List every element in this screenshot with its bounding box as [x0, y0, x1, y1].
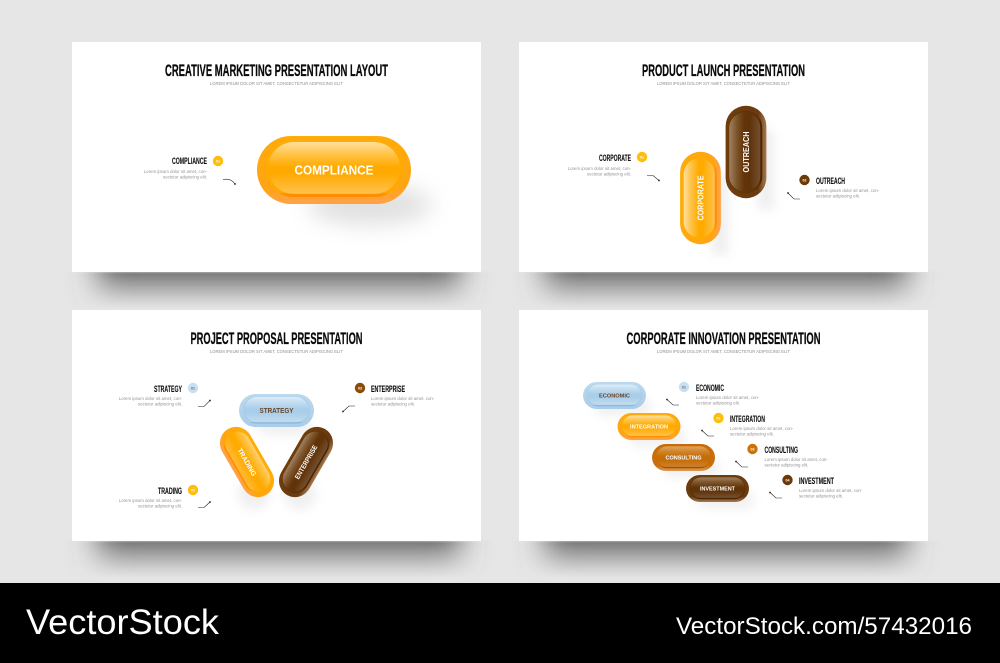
label: enterprise [355, 383, 435, 406]
pill: integration: INTEGRATION [630, 424, 668, 430]
footer logo: VectorStock [26, 603, 220, 642]
pill shadows [238, 420, 316, 510]
arrow [198, 501, 211, 508]
pill: economic [583, 382, 646, 409]
pill shadows [595, 398, 754, 509]
pill shadows [712, 130, 774, 255]
arrow [735, 461, 748, 467]
pill: compliance [257, 136, 411, 204]
arrow [198, 400, 211, 406]
pill: consulting: CONSULTING [666, 456, 702, 462]
label: strategy: 01 [191, 386, 195, 390]
label: enterprise: ENTERPRISE [371, 384, 405, 394]
title: PRODUCT LAUNCH PRESENTATION [642, 61, 805, 80]
label: integration: sectetur adipiscing elit. [730, 432, 774, 436]
pill: enterprise [273, 421, 339, 503]
pill: corporate [680, 152, 721, 244]
panel shadows [98, 272, 907, 579]
label: integration: INTEGRATION [730, 414, 765, 424]
label: corporate: CORPORATE [599, 153, 631, 163]
pill: outreach: OUTREACH [742, 131, 751, 172]
label: compliance: Lorem ipsum dolor sit amet, con- [144, 169, 208, 174]
label: economic [679, 382, 760, 406]
label: economic: ECONOMIC [696, 383, 724, 393]
subtitle: LOREM IPSUM DOLOR SIT AMET, CONSECTETUR ADIPISCING ELIT [657, 81, 790, 86]
panel: product launch [519, 42, 928, 272]
subtitle: LOREM IPSUM DOLOR SIT AMET, CONSECTETUR ADIPISCING ELIT [210, 81, 343, 86]
arrow [769, 492, 782, 498]
label: consulting: sectetur adipiscing elit. [764, 462, 808, 468]
arrow [787, 192, 800, 199]
subtitle: LOREM IPSUM DOLOR SIT AMET, CONSECTETUR ADIPISCING ELIT [657, 349, 790, 354]
arrow [223, 179, 236, 185]
pill: investment: INVESTMENT [700, 486, 736, 492]
label: strategy: Lorem ipsum dolor sit amet, con- [119, 396, 183, 401]
label: corporate [568, 152, 647, 176]
arrow [701, 430, 714, 436]
label: investment: Lorem ipsum dolor sit amet, con- [799, 488, 863, 493]
label: trading: sectetur adipiscing elit. [138, 504, 182, 508]
title: CORPORATE INNOVATION PRESENTATION [626, 329, 820, 348]
title: CREATIVE MARKETING PRESENTATION LAYOUT [165, 61, 388, 80]
pill: trading: TRADING [235, 447, 257, 478]
label: consulting: 03 [750, 447, 754, 451]
subtitle: LOREM IPSUM DOLOR SIT AMET, CONSECTETUR ADIPISCING ELIT [210, 349, 343, 354]
label: consulting [747, 444, 828, 468]
label: investment: sectetur adipiscing elit. [799, 494, 843, 498]
pill: corporate: CORPORATE [696, 175, 705, 220]
label: trading: Lorem ipsum dolor sit amet, con- [119, 498, 183, 503]
label: trading [119, 485, 198, 508]
arrow [342, 406, 355, 412]
label: outreach: Lorem ipsum dolor sit amet, con- [816, 188, 880, 193]
label: compliance [144, 156, 223, 180]
label: corporate: 01 [640, 155, 644, 159]
pill: economic: ECONOMIC [599, 394, 630, 400]
label: investment: INVESTMENT [799, 476, 834, 486]
arrow [666, 399, 679, 405]
panel: corporate innovation [519, 310, 928, 541]
label: enterprise: Lorem ipsum dolor sit amet, con- [371, 396, 435, 401]
footer url: VectorStock.com/57432016 [676, 613, 972, 640]
label: outreach: 02 [802, 178, 806, 182]
label: trading: TRADING [158, 486, 182, 496]
label: compliance: sectetur adipiscing elit. [163, 174, 207, 180]
label: consulting: CONSULTING [764, 445, 798, 455]
arrow [647, 176, 660, 181]
label: enterprise: 03 [358, 386, 362, 390]
label: integration: Lorem ipsum dolor sit amet, con- [730, 426, 794, 431]
label: enterprise: sectetur adipiscing elit. [371, 402, 415, 406]
panel: creative marketing [72, 42, 481, 272]
pill: enterprise: ENTERPRISE [294, 444, 320, 481]
label: corporate: sectetur adipiscing elit. [587, 172, 631, 176]
label: outreach [799, 175, 880, 198]
pill: strategy: STRATEGY [260, 408, 294, 415]
label: economic: 01 [682, 385, 686, 389]
label: economic: Lorem ipsum dolor sit amet, con- [696, 395, 760, 400]
label: strategy: sectetur adipiscing elit. [138, 402, 182, 406]
label: integration: 02 [716, 416, 720, 420]
panel: project proposal [72, 310, 481, 541]
pill: consulting [652, 444, 715, 471]
label: economic: sectetur adipiscing elit. [696, 400, 740, 406]
title: PROJECT PROPOSAL PRESENTATION [190, 329, 362, 348]
pill: investment [686, 475, 749, 502]
label: consulting: Lorem ipsum dolor sit amet, con- [764, 457, 828, 462]
pill: compliance: COMPLIANCE [294, 162, 374, 178]
label: integration [713, 413, 794, 436]
label: compliance: 01 [216, 159, 220, 163]
pill shadow [308, 185, 432, 225]
label: strategy [119, 383, 198, 406]
label: strategy: STRATEGY [154, 384, 182, 394]
label: investment [782, 475, 863, 498]
pill: integration [618, 413, 680, 440]
label: outreach: OUTREACH [816, 176, 845, 186]
pill: trading [214, 421, 280, 503]
label: compliance: COMPLIANCE [172, 156, 207, 166]
label: trading: 02 [191, 488, 195, 492]
label: investment: 04 [786, 478, 790, 482]
label: corporate: Lorem ipsum dolor sit amet, con- [568, 166, 632, 171]
pill: strategy [239, 394, 314, 427]
footer bar [0, 583, 1000, 663]
pill: outreach [726, 106, 766, 198]
label: outreach: sectetur adipiscing elit. [816, 194, 860, 198]
